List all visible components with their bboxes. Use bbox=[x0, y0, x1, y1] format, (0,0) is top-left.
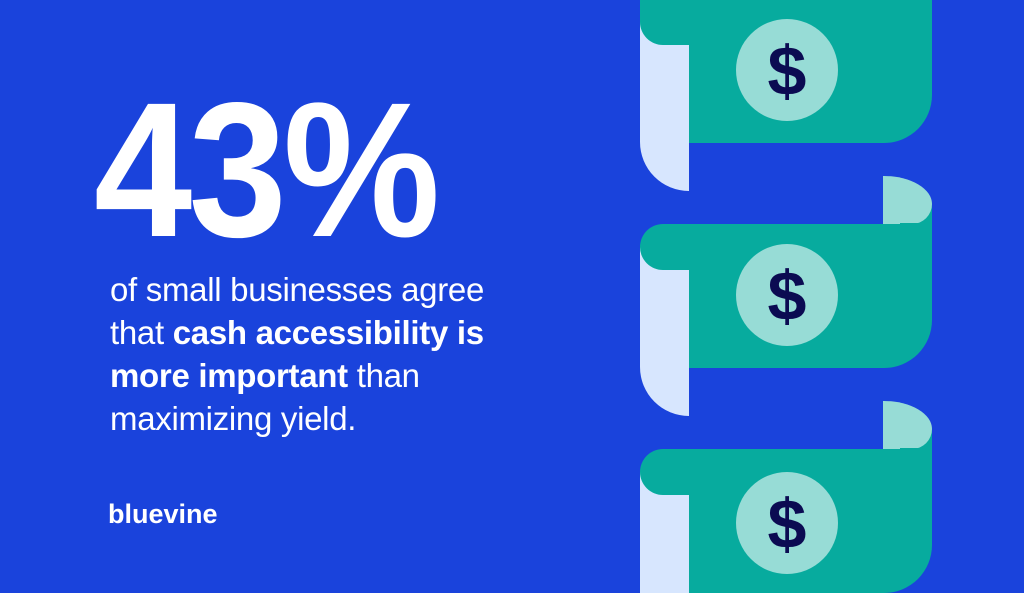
bill 1 bbox=[640, 0, 932, 191]
bill 3 bbox=[640, 401, 932, 593]
logo: bluevine bbox=[108, 499, 218, 529]
description text: more important than bbox=[110, 357, 420, 394]
description text: that cash accessibility is bbox=[110, 314, 484, 351]
description text: of small businesses agree bbox=[110, 271, 484, 308]
bill 1: $ bbox=[768, 32, 806, 110]
description text bbox=[110, 271, 484, 437]
description text: maximizing yield. bbox=[110, 400, 356, 437]
bill 2: $ bbox=[768, 257, 806, 335]
headline stat: 43% bbox=[94, 62, 436, 277]
bill 2 bbox=[640, 176, 932, 416]
bill 3: $ bbox=[768, 485, 806, 563]
